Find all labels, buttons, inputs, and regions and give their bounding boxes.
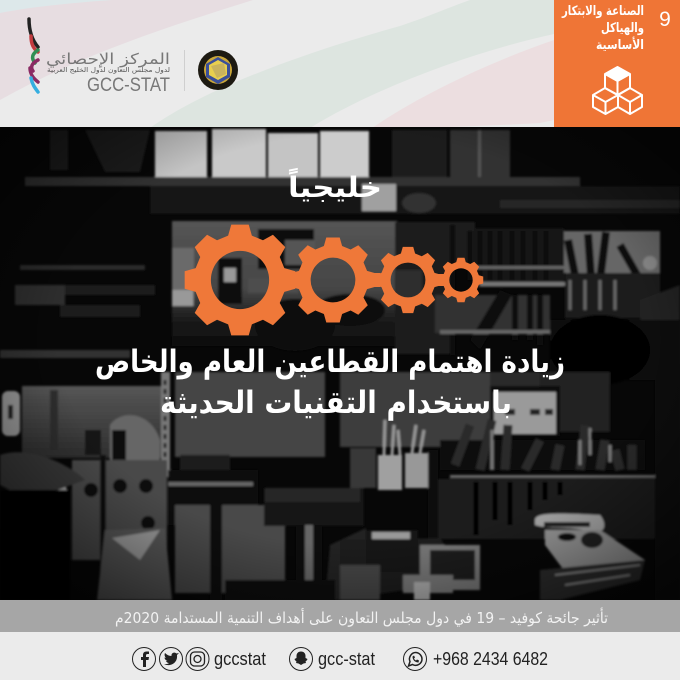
handle: gccstat: gccstat (214, 649, 266, 669)
welder machine (110, 415, 160, 462)
poster (490, 386, 560, 436)
logo divider (184, 50, 185, 91)
buckets bottom left (97, 528, 172, 600)
gear 3 (375, 247, 441, 313)
tool rack handles (440, 440, 645, 470)
SDG title: الصناعة والابتكار (561, 4, 644, 19)
workshop photograph (0, 127, 680, 600)
central workbench (168, 470, 258, 525)
mid band (435, 295, 550, 333)
icon: facebook (132, 648, 156, 670)
cabinets (392, 130, 447, 178)
storage buckets (155, 131, 207, 178)
SDG title: الأساسية (596, 36, 644, 53)
SDG title (561, 4, 644, 53)
logo Arabic name: المركز الإحصائي (46, 50, 170, 69)
hanging tools right (568, 232, 640, 290)
SDG title: والهياكل (601, 21, 644, 36)
headline: Gulf-wide: خليجياً (288, 167, 382, 204)
GCC emblem (198, 50, 238, 90)
lamp shade (0, 452, 85, 500)
upper left clutter (85, 130, 150, 172)
icon: twitter (160, 648, 182, 670)
gear 1 (185, 225, 295, 335)
header background waves (0, 0, 554, 128)
icon: stacked cubes (593, 67, 642, 114)
phone number: +968 2434 6482 (433, 649, 548, 669)
pile of tools on bench (340, 538, 470, 600)
SDG number: 9 (659, 8, 671, 31)
gears graphic (185, 225, 483, 335)
dark band at text line (0, 350, 130, 358)
main shelf (25, 177, 580, 186)
objects inside gear one (218, 258, 242, 304)
icon: instagram (186, 648, 209, 670)
main message (95, 344, 565, 421)
lower left wall (22, 386, 162, 458)
caption band (0, 600, 680, 632)
icon: snapchat (290, 648, 312, 670)
handle: gcc-stat: gcc-stat (318, 649, 375, 669)
logo Arabic subtitle: لدول مجلس التعاون لدول الخليج العربية (47, 66, 170, 74)
caption text: تأثير جائحة كوفيد – 19 في دول مجلس التعاون على أهداف التنمية المستدامة 2020م (115, 607, 608, 628)
SDG 9 panel (554, 0, 680, 127)
icon: whatsapp (404, 648, 426, 670)
left under-shelf shapes (20, 265, 145, 270)
connectors (287, 273, 445, 287)
footer contacts (0, 632, 680, 680)
message line 1: زيادة اهتمام القطاعين العام والخاص (95, 344, 565, 380)
walls behind gears (172, 221, 397, 346)
sign (362, 184, 396, 211)
tools holders on wall (350, 448, 376, 488)
logo Latin name: GCC-STAT (87, 75, 170, 96)
logo ribbon mark (29, 19, 38, 92)
dark shapes under gears (255, 299, 335, 351)
gear 4 (439, 258, 483, 302)
GCC-STAT logo (29, 19, 238, 96)
message line 2: باستخدام التقنيات الحديثة (160, 385, 512, 421)
gear 2 (291, 238, 375, 322)
